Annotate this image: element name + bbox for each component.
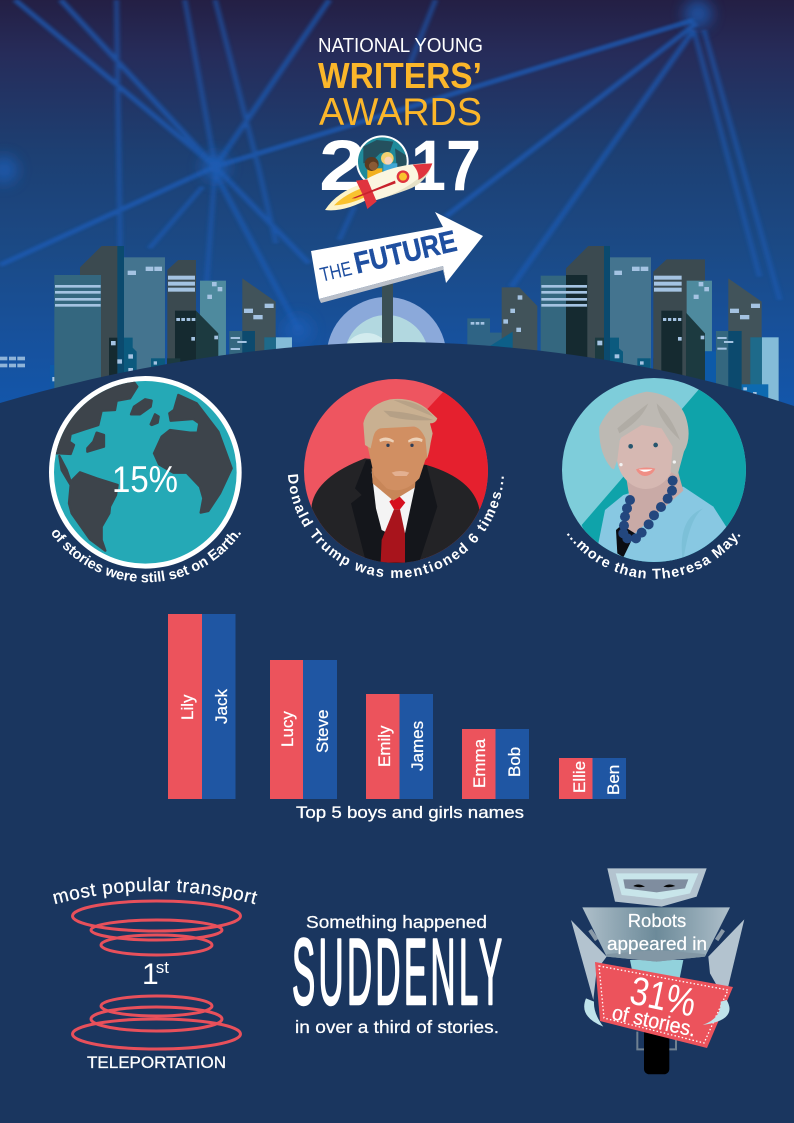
illustration: trump portrait [304, 379, 493, 567]
caption: trump: Donald Trump was mentioned 6 times... [288, 474, 504, 578]
title line: national young: NATIONAL YOUNG [318, 34, 483, 57]
text: something happened: Something happened [306, 912, 487, 932]
bars: emma and bob: Bob [505, 747, 524, 777]
bars: lucy and steve: Lucy [278, 711, 297, 747]
sign text: THE [318, 258, 354, 287]
label: of stories: of stories. [610, 1001, 698, 1042]
bars: lucy and steve: Steve [313, 710, 332, 753]
icon: earth bubble [356, 135, 409, 180]
dome behind signpost [326, 297, 446, 417]
bars: ellie and ben: Ben [604, 765, 623, 795]
year 2017: 2 [319, 127, 366, 206]
panel: theresa may [562, 378, 746, 579]
stat: 1st: 1 [142, 958, 159, 991]
icon: flame [325, 183, 373, 210]
searchlight beams [0, 0, 780, 330]
background: night sky [0, 0, 794, 420]
icon: globe [47, 376, 242, 569]
sign text: FUTURE [351, 225, 460, 280]
robot wheel and legs [637, 1028, 676, 1074]
panel: suddenly [292, 912, 505, 1037]
title [318, 34, 483, 134]
text: in over a third of stories: in over a third of stories. [295, 1017, 499, 1037]
panel: earth stat [49, 376, 242, 582]
text: robots appeared in: Robots [628, 910, 686, 931]
year 2017: 17 [411, 127, 481, 206]
stat: 31%: 31% [626, 969, 700, 1026]
icon: upper teleport rings [72, 901, 240, 955]
sign text [316, 225, 460, 289]
bars: ellie and ben [559, 758, 626, 799]
year 2017 [319, 127, 481, 206]
bars: ellie and ben: Ellie [570, 761, 589, 793]
panel: transport [53, 877, 258, 1072]
left city skyline [0, 246, 292, 388]
arrow sign: the future [311, 212, 483, 303]
text: suddenly: SUDDENLY [292, 920, 505, 1025]
bars: emma and bob [462, 729, 529, 799]
stat: 15%: 15% [112, 459, 178, 500]
panel: robots [571, 868, 744, 1074]
bars: emily and james [366, 694, 433, 799]
label: teleportation: TELEPORTATION [87, 1053, 226, 1072]
icon: fins [356, 179, 377, 209]
robot hands [584, 998, 730, 1027]
bars: lily and jack: Jack [212, 689, 231, 724]
robot shoulders [582, 907, 730, 962]
caption: earth: of stories were still set on Earth. [52, 530, 241, 582]
panel: robots: appeared in [607, 933, 707, 954]
sign post [382, 277, 393, 343]
bar chart: top names [168, 614, 626, 822]
illustration: robot [571, 868, 744, 1074]
title line: awards: AWARDS [319, 91, 482, 134]
robot head [607, 868, 707, 907]
bars: emma and bob: Emma [470, 738, 489, 788]
ground hill [0, 342, 794, 1123]
icon: rocket with children [325, 135, 432, 210]
robot neck [630, 960, 683, 993]
title line: writers: WRITERS’ [318, 55, 482, 96]
illustration: may portrait [562, 378, 753, 570]
panel: donald trump [288, 379, 504, 578]
bars: emily and james: Emily [375, 725, 394, 767]
bars: lucy and steve [270, 660, 337, 799]
robot arms [571, 919, 744, 1000]
icon: rocket body [360, 163, 432, 202]
bars: lily and jack: Lily [178, 694, 197, 720]
bars: emily and james: James [408, 721, 427, 771]
ribbon: 31% of stories [595, 962, 733, 1048]
right city skyline [467, 246, 779, 404]
icon: lower teleport rings [72, 996, 240, 1049]
curved heading: most popular transport: most popular transport [53, 877, 258, 904]
bars: lily and jack [168, 614, 236, 799]
stat: 1st: st [156, 958, 169, 977]
beam glow [0, 0, 712, 344]
chart caption: Top 5 boys and girls names [296, 803, 524, 822]
caption: may: ...more than Theresa May. [566, 533, 740, 579]
